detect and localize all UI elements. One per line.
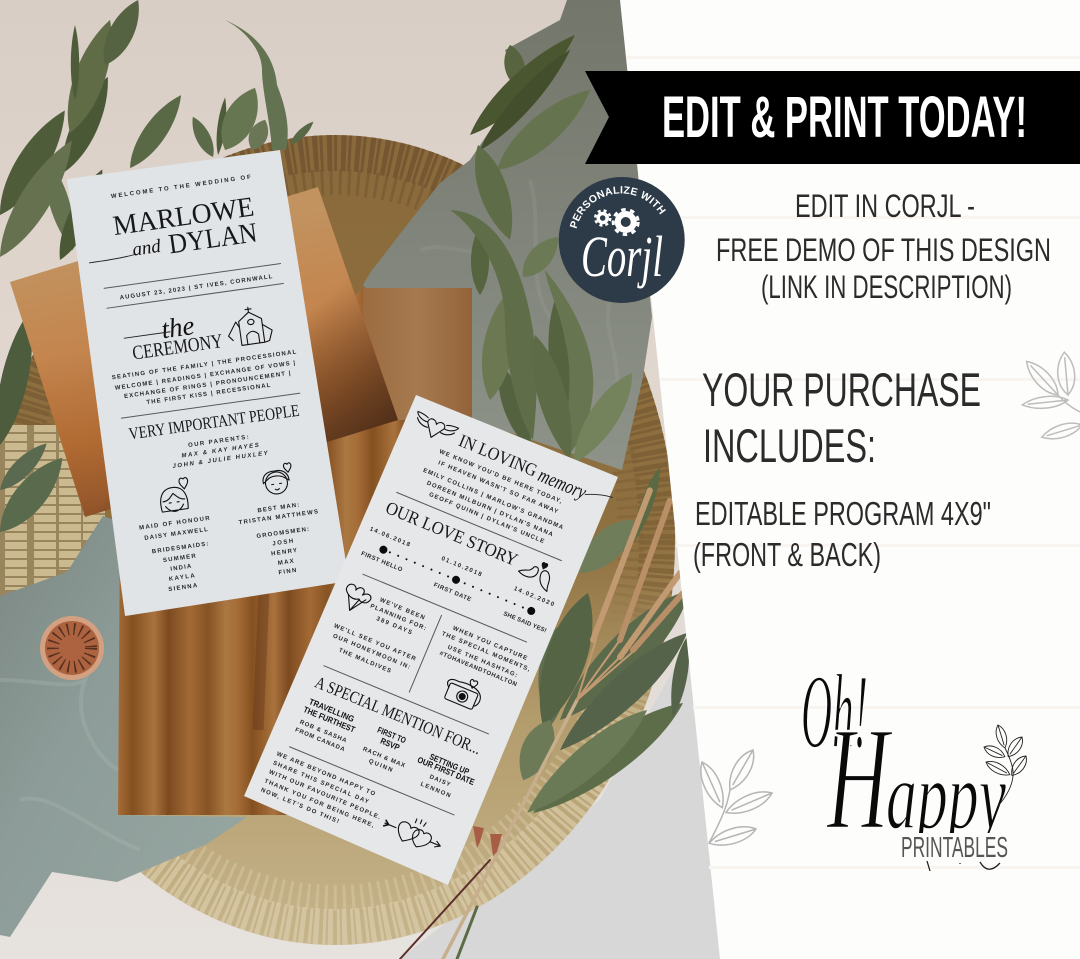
closing message — [260, 751, 389, 839]
honeymoon: WE'LL SEE YOU AFTER — [333, 623, 417, 663]
parents: OUR PARENTS: — [188, 435, 249, 449]
text block: edit in Corjl — [716, 188, 1051, 305]
groom party — [237, 500, 326, 581]
date and venue: AUGUST 23, 2023 | ST IVES, CORNWALL — [119, 274, 273, 302]
ceremony order: EXCHANGE OF RINGS | PRONOUNCEMENT | — [124, 371, 291, 400]
mention: setting up our first date — [408, 748, 479, 806]
grey shadowed table, lower right — [400, 640, 720, 959]
couple names — [82, 192, 260, 272]
eucalyptus leaves, centre right — [450, 26, 644, 471]
mention: travelling the furthest: THE FURTHEST — [302, 704, 357, 735]
icon: winged heart — [411, 411, 459, 446]
eucalyptus leaves, upper left — [0, 0, 316, 448]
groom party: HENRY — [271, 548, 297, 558]
ceremony order: THE FIRST KISS | RECESSIONAL — [146, 383, 271, 406]
planning countdown: PLANNING FOR: — [369, 604, 427, 632]
mention: travelling the furthest: FROM CANADA — [294, 727, 346, 753]
welcome line: WELCOME TO THE WEDDING OF — [111, 175, 251, 200]
our love story heading: OUR LOVE STORY — [383, 497, 521, 570]
closing message: THANK YOU FOR BEING HERE, — [263, 779, 375, 829]
in loving memory heading — [455, 430, 615, 514]
couple names: MARLOWE — [111, 192, 256, 242]
heading: your purchase includes: INCLUDES: — [703, 419, 876, 472]
parents: JOHN & JULIE HUXLEY — [172, 451, 269, 470]
dried wheat stalks and buds — [400, 490, 683, 959]
planning countdown — [366, 595, 430, 641]
mention: travelling the furthest — [294, 695, 361, 754]
eucalyptus leaves, lower left — [0, 437, 74, 542]
closing message: WITH OUR FAVOURITE PEOPLE. — [268, 769, 381, 821]
grey linen cloth, top — [363, 0, 652, 470]
mention: travelling the furthest: TRAVELLING — [308, 696, 356, 724]
hashtag: WHEN YOU CAPTURE — [452, 626, 528, 662]
mention: first to RSVP — [358, 722, 416, 778]
timeline: FIRST HELLO — [360, 551, 403, 574]
hashtag: USE THE HASHTAG: — [447, 645, 518, 679]
text block: edit in Corjl: EDIT IN CORJL - — [795, 188, 975, 224]
bridal party: INDIA — [170, 564, 192, 573]
bridal party: SUMMER — [163, 553, 197, 564]
couple names: DYLAN — [167, 217, 259, 260]
ribbon banner — [585, 71, 1080, 164]
mention: setting up our first date: DAISY — [428, 774, 451, 788]
icon: bride face — [158, 477, 192, 513]
text block: product details: (FRONT & BACK) — [693, 536, 881, 573]
hashtag: #TOHAVEANDTOHALTON — [438, 651, 517, 688]
logo: Oh! Happy Printables: H — [826, 697, 893, 861]
parents: MAX & KAY HAYES — [181, 443, 259, 459]
icon: church — [225, 304, 274, 347]
mention: first to RSVP: FIRST TO — [376, 725, 408, 745]
honeymoon — [325, 623, 417, 682]
mention: first to RSVP: RSVP — [379, 736, 402, 753]
memorial text: DOREEN MILBURN | DYLAN'S NANA — [426, 481, 554, 538]
ceremony order: SEATING OF THE FAMILY | THE PROCESSIONAL — [112, 350, 297, 381]
timeline — [358, 526, 557, 634]
groom party: GROOMSMEN: — [256, 527, 310, 540]
groom party: JOSH — [272, 539, 294, 547]
mention: setting up our first date: LENNON — [419, 782, 451, 799]
program card: back — [244, 395, 618, 885]
couple names: and — [131, 236, 163, 261]
planning countdown: 389 DAYS — [375, 616, 413, 636]
in loving memory heading: memory — [535, 464, 589, 504]
icon: large gear — [613, 210, 638, 234]
wooden serving board, upright — [118, 288, 472, 815]
icon: balloons — [339, 583, 373, 616]
bridal party: BRIDESMAIDS: — [152, 541, 209, 555]
hashtag — [433, 623, 534, 691]
closing message: WE ARE BEYOND HAPPY TO — [275, 751, 376, 798]
program card: front — [67, 150, 349, 616]
logo: Oh! Happy Printables — [801, 653, 1030, 871]
woven mat centre, left side — [0, 425, 105, 595]
mention: first to RSVP: QUINN — [368, 759, 393, 774]
timeline: FIRST DATE — [433, 582, 472, 603]
groom party: BEST MAN: — [257, 503, 300, 514]
copper wax seal — [40, 616, 104, 680]
icon: camera — [442, 671, 486, 711]
hashtag: THE SPECIAL MOMENTS, — [441, 631, 531, 673]
bridal party: MAID OF HONOUR — [139, 516, 211, 532]
decorative grey leaf sprig, bottom — [695, 746, 775, 850]
badge: personalize with Corjl — [558, 177, 685, 303]
the ceremony heading: CEREMONY — [131, 330, 224, 365]
timeline: 01.10.2018 — [440, 556, 483, 578]
closing message: SHARE THIS SPECIAL DAY — [272, 760, 369, 805]
icon: small gear — [595, 210, 610, 226]
eucalyptus leaves, lower right — [509, 465, 704, 827]
badge: personalize with Corjl: Corjl — [581, 224, 663, 289]
wooden serving board, tilted — [10, 187, 398, 517]
groom party: TRISTAN MATTHEWS — [238, 509, 318, 526]
curved right leaf — [545, 270, 593, 458]
text block: product details — [693, 495, 991, 573]
mention: first to RSVP: RACH & MAX — [362, 747, 406, 769]
in loving memory heading: IN LOVING — [456, 430, 540, 481]
logo: Oh! Happy Printables: appy — [886, 742, 1006, 849]
memorial text: WE KNOW YOU'D BE HERE TODAY, — [438, 449, 563, 505]
special mention heading: A SPECIAL MENTION FOR... — [312, 673, 484, 758]
icon: logo leaf sprig — [982, 724, 1030, 806]
ceremony order — [112, 350, 301, 410]
the ceremony heading — [121, 306, 224, 366]
logo: Oh! Happy Printables: PRINTABLES — [901, 832, 1008, 864]
honeymoon: OUR HONEYMOON IN: — [332, 633, 411, 671]
groom party: FINN — [278, 568, 297, 576]
timeline: 14.06.2018 — [369, 526, 411, 549]
white plank panel — [620, 0, 1080, 959]
ceremony order: WELCOME | READINGS | EXCHANGE OF VOWS | — [115, 360, 296, 392]
mention: travelling the furthest: ROB & SASHA — [299, 720, 348, 744]
very important people heading: VERY IMPORTANT PEOPLE — [128, 401, 301, 443]
memorial text: GEOFF QUINN | DYLAN'S UNCLE — [428, 492, 545, 545]
logo: Oh! Happy Printables: Oh! — [801, 653, 868, 770]
closing message: NOW, LET'S DO THIS! — [260, 787, 340, 825]
the ceremony heading: the — [159, 310, 196, 344]
icon: hearts with arrow — [381, 807, 447, 855]
badge: personalize with Corjl: PERSONALIZE WITH — [570, 186, 666, 228]
honeymoon: THE MALDIVES — [338, 648, 392, 675]
mention: setting up our first date: SETTING UP — [428, 751, 471, 777]
long curved centre leaf — [450, 210, 537, 440]
bridal party: DAISY MAXWELL — [144, 527, 209, 542]
bridal party: KAYLA — [169, 573, 196, 583]
long curved leaf — [225, 20, 288, 150]
timeline: SHE SAID YES! — [502, 611, 547, 634]
bridal party: SIENNA — [168, 583, 198, 593]
icon: love birds — [515, 555, 557, 591]
heading: your purchase includes — [702, 363, 981, 472]
bridal party — [139, 516, 220, 596]
mention: setting up our first date: OUR FIRST DATE — [416, 754, 476, 787]
groom party: MAX — [278, 559, 294, 567]
memorial text: IF HEAVEN WASN'T SO FAR AWAY — [437, 460, 559, 515]
planning countdown: WE'VE BEEN — [379, 597, 425, 621]
decorative grey leaf sprig, right edge — [1021, 351, 1080, 443]
memorial text: EMILY COLLINS | MARLOW'S GRANDMA — [422, 468, 564, 531]
timeline: 14.02.2020 — [513, 586, 555, 608]
parents — [170, 432, 269, 470]
memorial text — [414, 446, 573, 550]
icon: groom face — [261, 463, 294, 496]
green-grey cloth, lower left — [0, 516, 247, 937]
round straw mat — [0, 135, 675, 945]
